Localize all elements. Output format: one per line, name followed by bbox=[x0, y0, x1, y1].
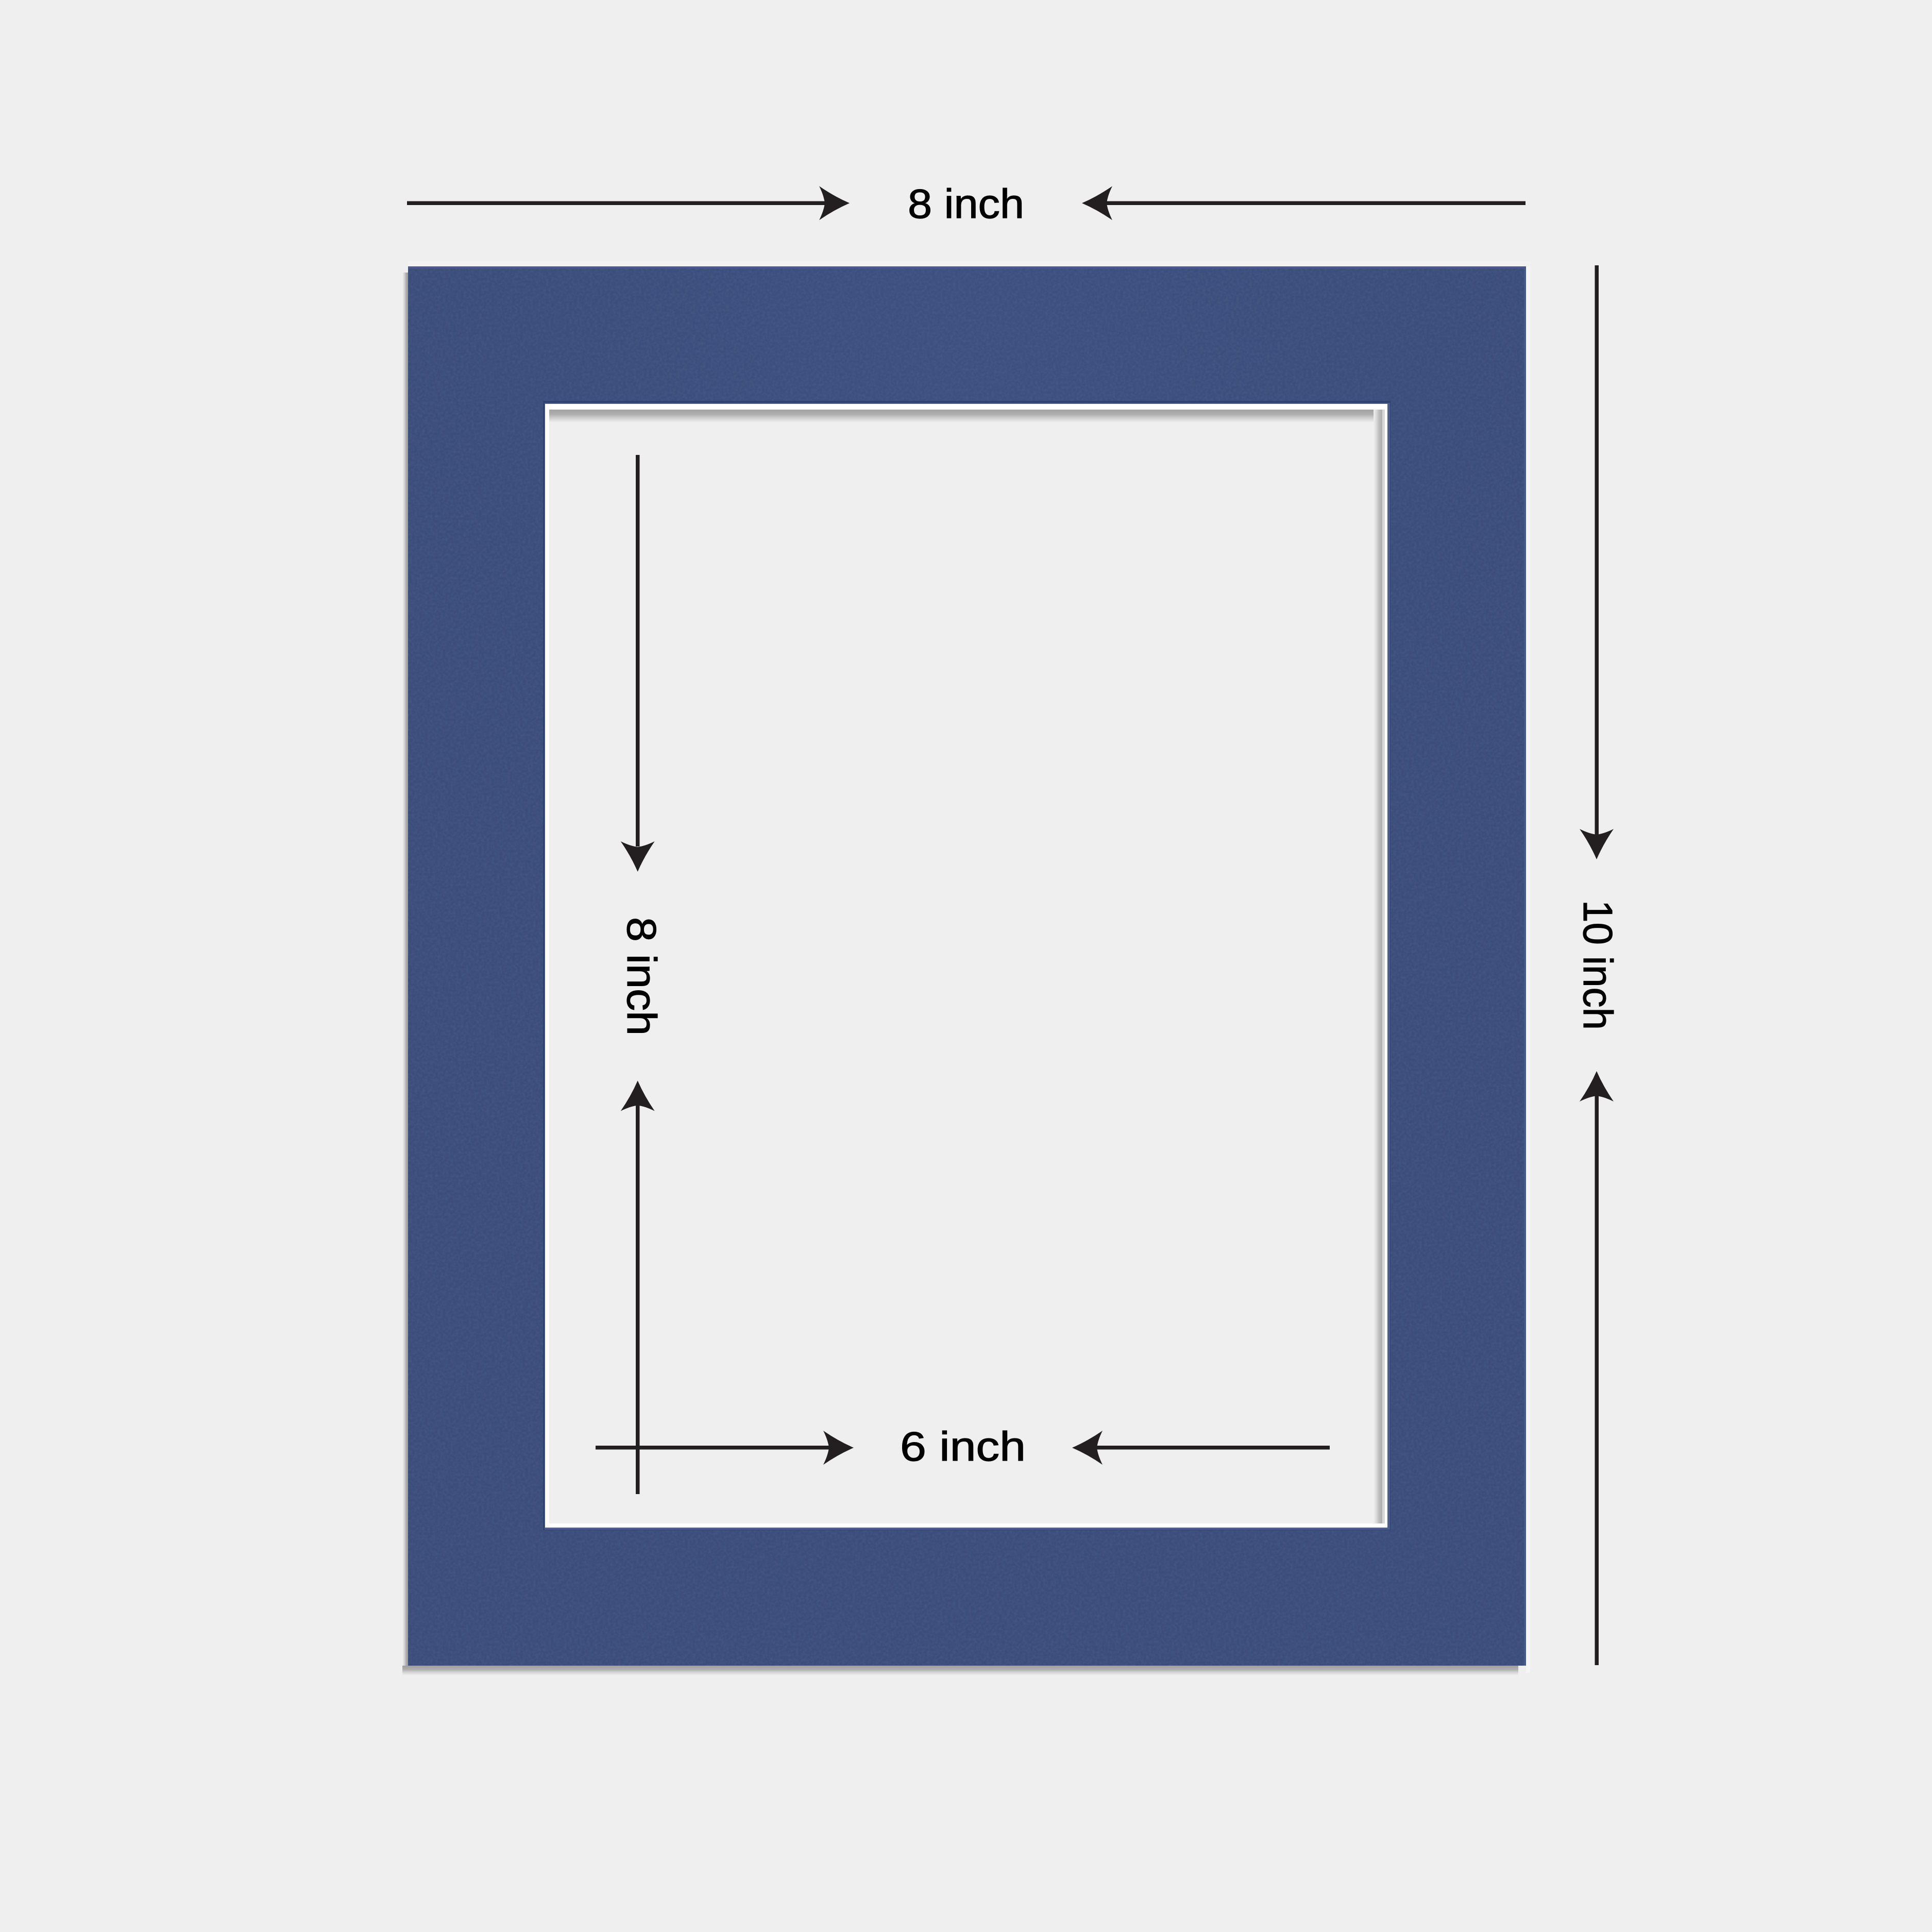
arrow: outer right, pointing down bbox=[1580, 265, 1614, 859]
label: top width 8 inch: 8 inch bbox=[908, 181, 1024, 227]
arrow: inner bottom left, pointing right bbox=[596, 1431, 854, 1465]
mat outer shadow bbox=[402, 261, 1530, 1675]
white bevel bbox=[545, 404, 1387, 1528]
window opening bbox=[549, 410, 1385, 1523]
arrow: inner left, pointing up bbox=[621, 1081, 655, 1494]
mat board bbox=[408, 266, 1526, 1666]
panel: blue photo mat bbox=[402, 261, 1530, 1675]
label: inner width 6 inch: 6 inch bbox=[900, 1423, 1026, 1469]
window bevel edge bbox=[543, 401, 1391, 1530]
label: inner height 8 inch: 8 inch bbox=[619, 917, 665, 1036]
arrow: outer right, pointing up bbox=[1580, 1071, 1614, 1665]
label: outer height 10 inch: 10 inch bbox=[1575, 900, 1621, 1030]
arrow: top left, pointing right bbox=[407, 186, 850, 220]
arrow: top right, pointing left bbox=[1082, 186, 1526, 220]
arrow: inner left, pointing down bbox=[621, 455, 655, 872]
arrow: inner bottom right, pointing left bbox=[1072, 1431, 1330, 1465]
